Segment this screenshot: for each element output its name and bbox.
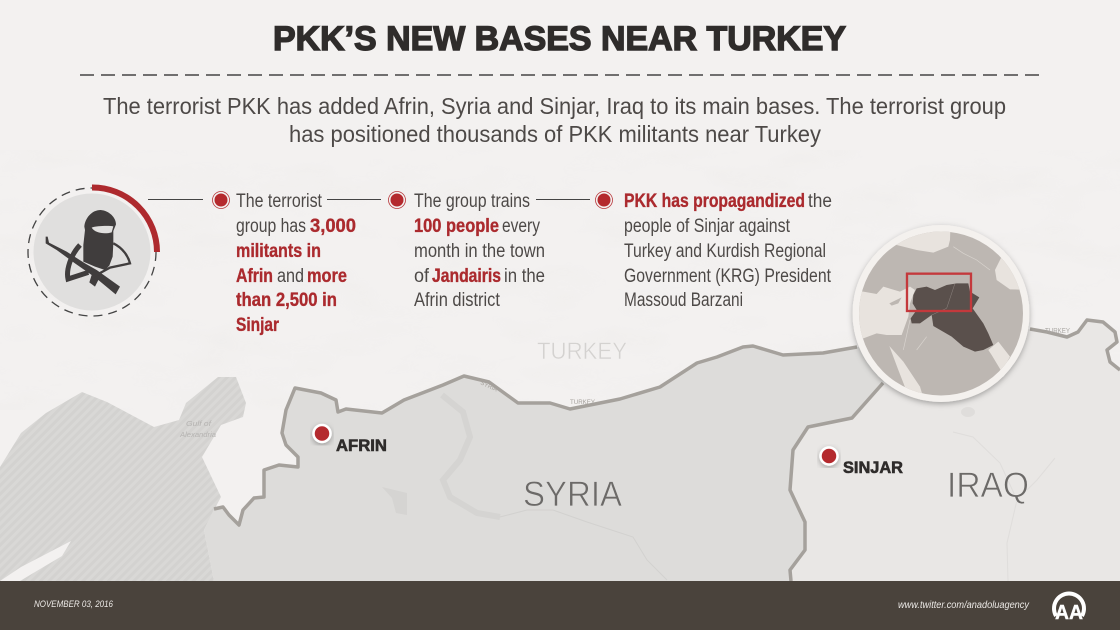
Caspian Sea — [995, 258, 1020, 290]
text block 3: Government (KRG) President — [624, 266, 832, 287]
map — [0, 150, 1120, 581]
logo: Anadolu Agency — [1054, 594, 1084, 624]
label: Gulf of Alexandria — [179, 421, 216, 439]
label: Syria: SYRIA — [523, 475, 623, 514]
footer bar — [0, 581, 1120, 630]
text block 2: every — [502, 216, 540, 237]
text block 1: group has — [236, 216, 306, 237]
text block 3: Massoud Barzani — [624, 290, 743, 311]
terrain texture — [0, 150, 1120, 410]
text block 2: Afrin district — [414, 290, 501, 311]
label: Turkey border central: TURKEY — [570, 400, 595, 406]
region: Gulf of Alexandretta sea — [0, 377, 246, 581]
connector and marker 3 — [536, 192, 612, 208]
border: Turkey-Iraq east — [1030, 320, 1120, 370]
region: Syria — [204, 345, 900, 581]
region: lower Turkey shading — [780, 320, 1120, 581]
text block 1: than 2,500 in — [236, 290, 337, 311]
subtitle: The terrorist PKK has added Afrin, Syria and Sinjar, Iraq to its main bases. The terrorist group — [103, 93, 1006, 119]
Red Sea — [890, 346, 922, 393]
connector and marker 2 — [327, 192, 406, 208]
marker: Sinjar — [820, 448, 903, 477]
text block 2 — [414, 191, 545, 311]
river: Euphrates lower course — [500, 510, 667, 580]
text block 1: The terrorist — [236, 191, 323, 212]
title: PKK’S NEW BASES NEAR TURKEY — [273, 20, 846, 58]
logo: Anadolu Agency: AA — [1055, 602, 1083, 624]
red locator rectangle — [907, 274, 971, 311]
Black Sea — [896, 232, 950, 253]
text block 1: 3,000 — [310, 216, 356, 237]
subtitle — [103, 93, 1006, 147]
label: Turkey border east: TURKEY — [1045, 328, 1070, 335]
marker: Afrin — [314, 425, 387, 455]
region: Cyprus coast — [0, 541, 71, 581]
label: Iraq: IRAQ — [947, 466, 1029, 505]
text block 2: in the — [504, 266, 545, 287]
Persian Gulf — [988, 342, 1010, 372]
border: Syria-Iraq — [790, 383, 883, 581]
marker: Sinjar: SINJAR — [843, 459, 903, 477]
text block 3: the — [808, 191, 832, 212]
label: Syria border: SYRIA — [479, 380, 498, 393]
label: Turkey: TURKEY — [537, 338, 627, 365]
connector and marker 1 — [148, 192, 230, 208]
label: Gulf of Alexandria: Alexandria — [179, 432, 216, 439]
text block 3: Turkey and Kurdish Regional — [624, 241, 826, 262]
footer date: NOVEMBER 03, 2016 — [34, 599, 113, 609]
Cyprus — [889, 297, 902, 306]
text block 2: The group trains — [414, 191, 530, 212]
text block 2: 100 people — [414, 216, 499, 237]
text block 1: Afrin — [236, 266, 273, 287]
borders: neighbouring countries — [903, 247, 990, 350]
border: Turkey-Syria — [214, 346, 857, 525]
river: Euphrates — [442, 395, 500, 517]
text block 3 — [624, 191, 832, 311]
text block 2: of — [414, 266, 430, 287]
lake: Mosul — [961, 407, 975, 417]
subtitle: has positioned thousands of PKK militants near Turkey — [289, 121, 821, 147]
text block 3: PKK has propagandized — [624, 191, 805, 212]
text block 1 — [236, 191, 356, 336]
text block 2: Jandairis — [432, 266, 501, 287]
text block 3: people of Sinjar against — [624, 216, 791, 237]
text block 1: militants in — [236, 241, 321, 262]
icon: militant with rifle — [28, 187, 157, 316]
text block 2: month in the town — [414, 241, 545, 262]
Syria and Iraq highlighted — [911, 283, 993, 352]
lake: Assad — [382, 487, 407, 515]
Syria-Iraq border — [932, 283, 955, 315]
text block 1: and — [277, 266, 304, 287]
rivers: Iraq — [953, 432, 1055, 581]
inset locator map — [840, 220, 1033, 403]
divider — [80, 74, 1041, 76]
text block 1: Sinjar — [236, 315, 279, 336]
marker: Afrin: AFRIN — [336, 437, 387, 455]
footer url: www.twitter.com/anadoluagency — [898, 600, 1030, 611]
label: Gulf of Alexandria: Gulf of — [186, 421, 212, 428]
text block 1: more — [307, 266, 347, 287]
Mediterranean Sea — [859, 286, 915, 338]
